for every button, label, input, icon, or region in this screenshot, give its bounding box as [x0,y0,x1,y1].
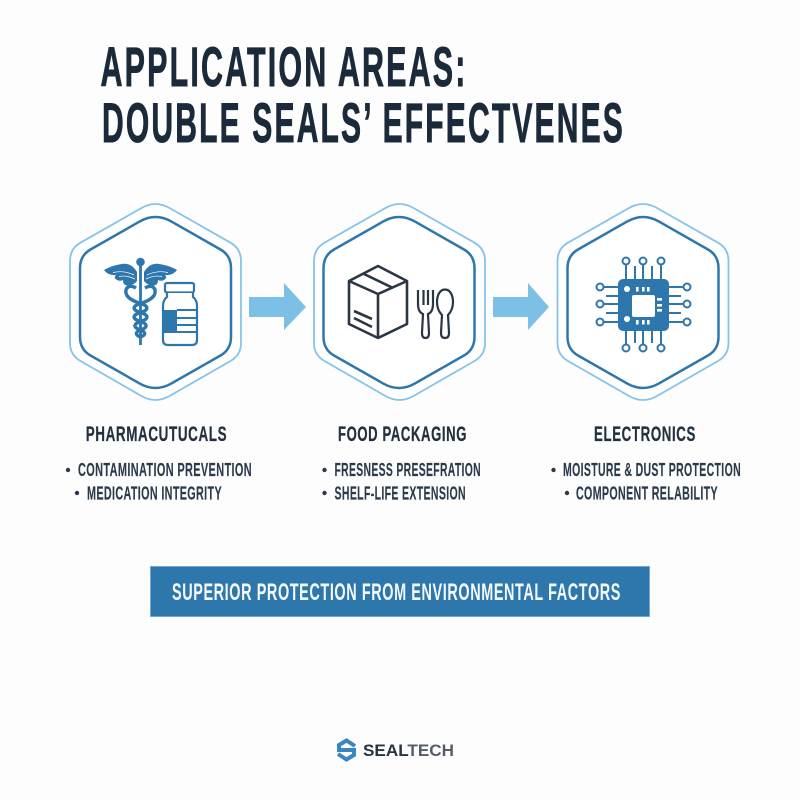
text block: pharmaceuticals [66,422,252,504]
hexagon: electronics [558,204,728,400]
icon: microchip [596,258,690,352]
icon: fork [418,290,433,338]
text block: food packaging: FOOD PACKAGING [338,422,467,446]
icon: caduceus [104,258,177,345]
icon: spoon [437,290,453,338]
hexagon: pharmaceuticals [70,204,241,400]
text block: pharmaceuticals: MEDICATION INTEGRITY [87,482,222,504]
text block: pharmaceuticals: PHARMACUTUCALS [86,422,227,446]
hexagon: food packaging [314,204,485,400]
icon: cardboard box [349,266,407,338]
text block: food packaging: FRESNESS PRESEFRATION [334,459,481,480]
icon: S hexagon [338,740,355,760]
arrow: pharmaceuticals to food packaging [249,283,306,330]
text block: pharmaceuticals: CONTAMINATION PREVENTION [78,459,252,480]
title [100,35,625,154]
text block: food packaging: SHELF-LIFE EXTENSION [334,482,466,504]
text block: electronics: ELECTRONICS [594,422,696,446]
text block: electronics [551,422,741,504]
text block: food packaging [322,422,481,504]
logo: SealTech: SEALTECH [363,741,454,760]
icon: medicine bottle [163,283,197,345]
title: APPLICATION AREAS: [100,35,468,98]
callout banner [150,566,650,616]
arrow: food packaging to electronics [493,283,549,330]
